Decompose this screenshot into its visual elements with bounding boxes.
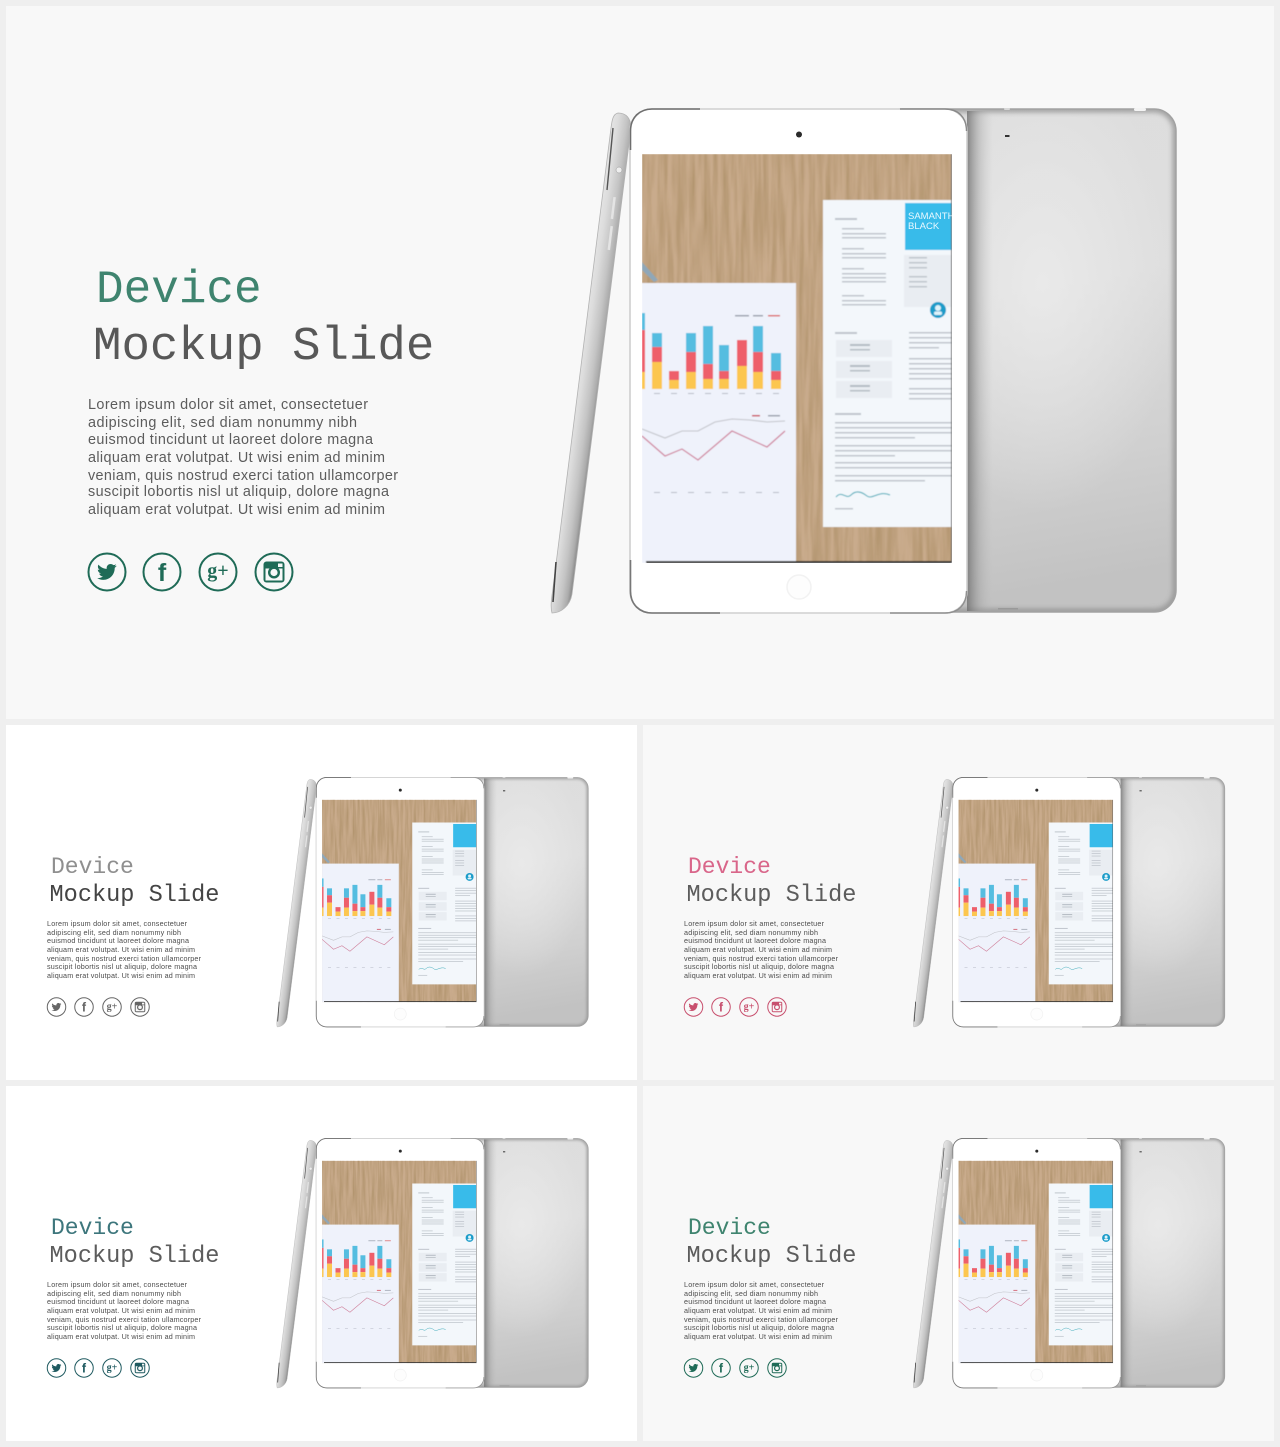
body text: euismod tincidunt ut laoreet dolore magna [684, 936, 826, 945]
social icons: f [82, 1000, 87, 1014]
social icons: f [158, 559, 167, 587]
tablet screen [642, 154, 952, 563]
body text: aliquam erat volutpat. Ut wisi enim ad minim [47, 1332, 195, 1341]
body text: Lorem ipsum dolor sit amet, consectetuer [684, 1280, 825, 1289]
body text: aliquam erat volutpat. Ut wisi enim ad minim [47, 971, 195, 980]
body text [88, 397, 398, 518]
social icons: g+ [107, 1002, 118, 1012]
body text: aliquam erat volutpat. Ut wisi enim ad minim [684, 971, 832, 980]
body text [47, 1280, 202, 1341]
tablet mockup [277, 1138, 588, 1388]
tablet mockup: side, front and back views [551, 108, 1176, 613]
heading: Mockup Slide: Mockup Slide [50, 1243, 219, 1270]
panel: main slide [6, 6, 1274, 719]
body text: veniam, quis nostrud exerci tation ullamcorper [684, 954, 839, 963]
body text: suscipit lobortis nisl ut aliquip, dolore magna [684, 962, 834, 971]
heading: Device: Device [688, 1215, 771, 1241]
pen tip [642, 262, 658, 282]
body text: euismod tincidunt ut laoreet dolore magna [684, 1297, 826, 1306]
panel: neutral variant [6, 725, 637, 1080]
social icons [47, 998, 149, 1016]
body text: veniam, quis nostrud exerci tation ullamcorper [684, 1315, 839, 1324]
body text: suscipit lobortis nisl ut aliquip, dolore magna [88, 484, 389, 500]
tablet mockup [913, 777, 1225, 1027]
heading: Mockup Slide: Mockup Slide [50, 882, 219, 909]
social icons: g+ [744, 1002, 755, 1012]
tablet front [630, 109, 967, 613]
body text: aliquam erat volutpat. Ut wisi enim ad minim [47, 1306, 195, 1315]
body text: euismod tincidunt ut laoreet dolore magna [88, 432, 373, 448]
body text [684, 919, 839, 980]
social icons [684, 1359, 786, 1377]
body text [47, 919, 202, 980]
social icons: g+ [744, 1362, 755, 1374]
screen paper with bar and line charts [642, 283, 796, 563]
body text: adipiscing elit, sed diam nonummy nibh [88, 415, 357, 431]
heading: Mockup Slide: Mockup Slide [93, 321, 434, 374]
body text: veniam, quis nostrud exerci tation ullamcorper [88, 468, 398, 484]
body text: euismod tincidunt ut laoreet dolore magna [47, 1297, 189, 1306]
body text: euismod tincidunt ut laoreet dolore magna [47, 936, 189, 945]
body text: suscipit lobortis nisl ut aliquip, dolore magna [684, 1323, 834, 1332]
body text: suscipit lobortis nisl ut aliquip, dolore magna [47, 1323, 197, 1332]
social icons: f [719, 1000, 724, 1014]
body text: Lorem ipsum dolor sit amet, consectetuer [47, 919, 188, 928]
tablet mockup [913, 1138, 1225, 1388]
body text: aliquam erat volutpat. Ut wisi enim ad minim [684, 945, 832, 954]
panel: main slide: BLACK [908, 221, 940, 232]
panel: pink variant [643, 725, 1274, 1080]
body text: suscipit lobortis nisl ut aliquip, dolore magna [47, 962, 197, 971]
heading: Mockup Slide: Mockup Slide [686, 1243, 856, 1270]
body text: aliquam erat volutpat. Ut wisi enim ad minim [684, 1306, 832, 1315]
social icons: g+ [207, 560, 229, 582]
heading: Device: Device [51, 854, 134, 880]
body text: Lorem ipsum dolor sit amet, consectetuer [684, 919, 825, 928]
social icons: f [719, 1362, 724, 1376]
heading: Device: Device [51, 1215, 134, 1241]
resume heading text on tablet screen: SAMANTHA [908, 211, 961, 222]
body text: veniam, quis nostrud exerci tation ullamcorper [47, 954, 202, 963]
body text [684, 1280, 839, 1341]
panel: green variant [643, 1086, 1274, 1441]
body text: aliquam erat volutpat. Ut wisi enim ad minim [684, 1332, 832, 1341]
screen resume document [823, 200, 952, 527]
panel: teal variant [6, 1086, 637, 1441]
body text: adipiscing elit, sed diam nonummy nibh [684, 1289, 818, 1298]
tablet mockup [277, 777, 588, 1027]
body text: aliquam erat volutpat. Ut wisi enim ad minim [88, 450, 385, 466]
body text: aliquam erat volutpat. Ut wisi enim ad minim [47, 945, 195, 954]
heading: Mockup Slide: Mockup Slide [686, 882, 856, 909]
social icons [47, 1359, 149, 1377]
body text: adipiscing elit, sed diam nonummy nibh [47, 928, 181, 937]
social icons: f [82, 1362, 87, 1376]
social icons [684, 998, 786, 1016]
body text: adipiscing elit, sed diam nonummy nibh [684, 928, 818, 937]
body text: aliquam erat volutpat. Ut wisi enim ad minim [88, 502, 385, 518]
body text: Lorem ipsum dolor sit amet, consectetuer [88, 397, 368, 413]
body text: veniam, quis nostrud exerci tation ullamcorper [47, 1315, 202, 1324]
social icons [88, 554, 292, 590]
social icons: g+ [107, 1362, 118, 1374]
tablet side view [551, 113, 631, 613]
heading: Device: Device [96, 264, 262, 316]
heading: Device: Device [688, 854, 771, 880]
body text: adipiscing elit, sed diam nonummy nibh [47, 1289, 181, 1298]
screen wood background [642, 154, 952, 563]
body text: Lorem ipsum dolor sit amet, consectetuer [47, 1280, 188, 1289]
tablet back [880, 108, 1176, 612]
